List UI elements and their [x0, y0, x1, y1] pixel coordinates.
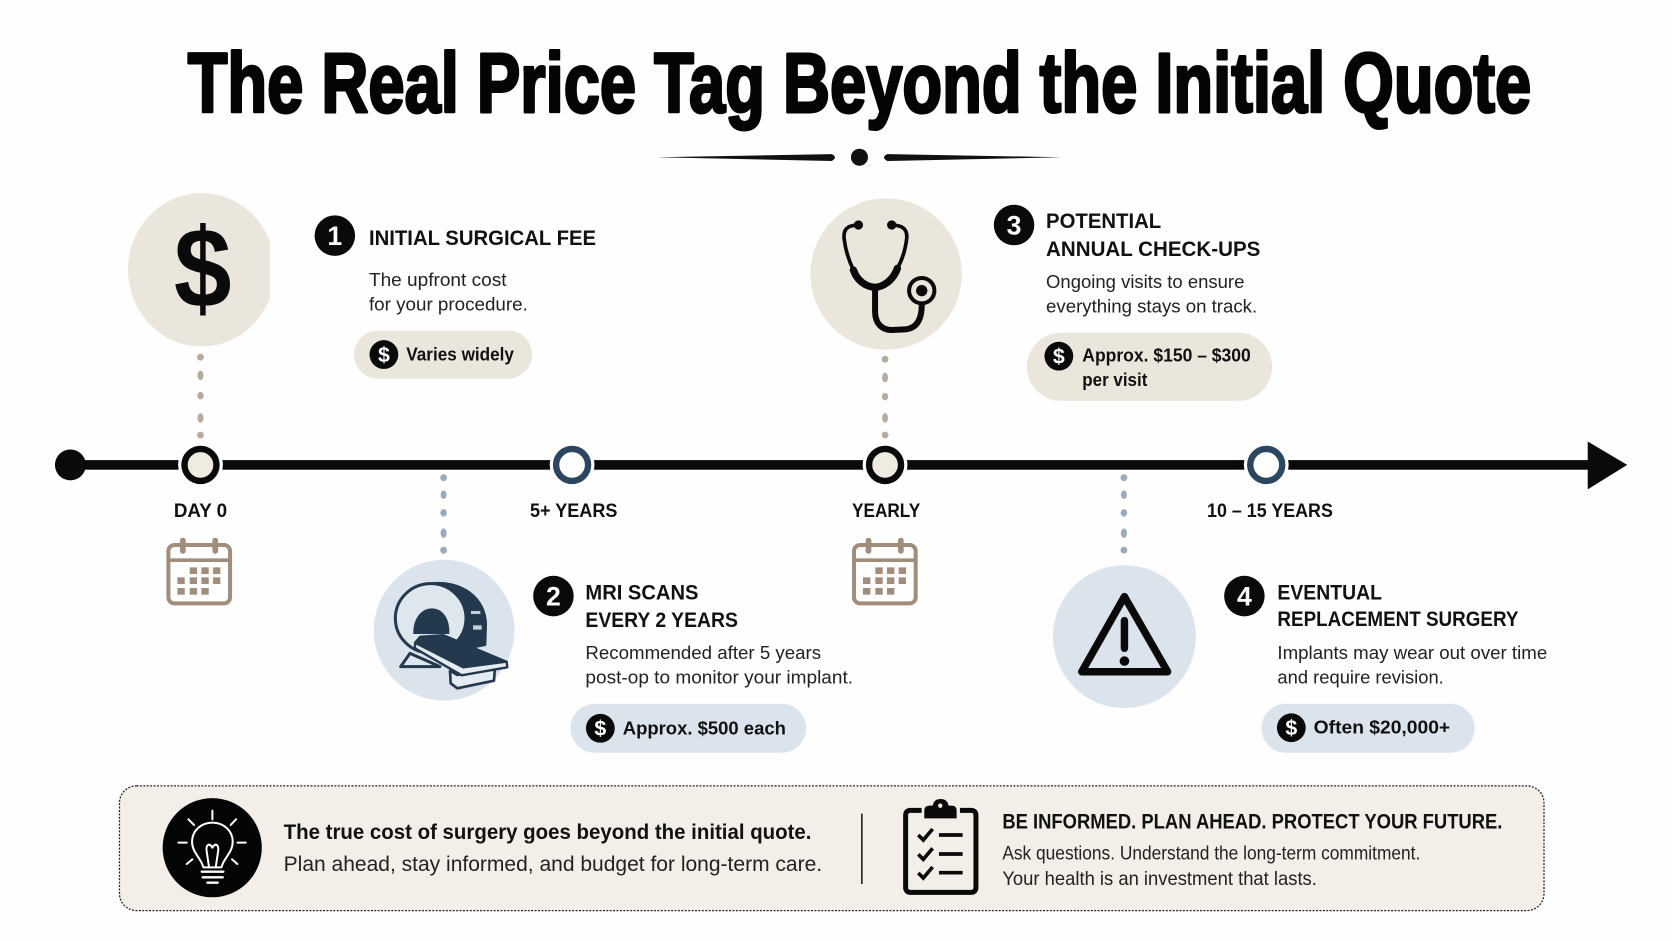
label: 5+ years: 5+ YEARS: [530, 501, 618, 522]
summary text left: [284, 820, 822, 876]
timeline arrow: [55, 441, 1627, 489]
step 3 heading: ANNUAL CHECK-UPS: [1046, 237, 1260, 261]
step 3 cost pill: per visit: [1082, 369, 1147, 390]
step 3 cost pill: Approx. $150 – $300: [1082, 344, 1251, 365]
step 1 cost pill: $: [378, 343, 390, 367]
timeline node: 10-15 years: [1244, 443, 1289, 487]
step 3 cost pill: $: [1053, 345, 1065, 369]
step 3 description: everything stays on track.: [1046, 295, 1257, 316]
step 1 cost pill: Varies widely: [406, 343, 515, 364]
icon: checklist clipboard: [906, 799, 976, 892]
step 2 heading: MRI SCANS: [585, 580, 698, 604]
icon: dollar circle: [128, 193, 275, 347]
icon: calendar day 0: [168, 538, 230, 603]
summary text left: Plan ahead, stay informed, and budget for long-term care.: [284, 852, 822, 876]
step number 2: 2: [546, 582, 561, 612]
summary text right: [1002, 810, 1502, 890]
title divider: [657, 149, 1062, 166]
step 3 heading: [1046, 209, 1260, 261]
step 4 cost pill: $: [1285, 716, 1297, 740]
step number 3: 3: [1007, 211, 1021, 241]
icon: stethoscope circle: [810, 198, 962, 350]
step 2 cost pill: [570, 704, 806, 753]
summary text right: Your health is an investment that lasts.: [1002, 868, 1317, 890]
step 3 cost pill: [1027, 333, 1272, 401]
icon: MRI scanner circle: [374, 560, 515, 701]
step 4 cost pill: Often $20,000+: [1314, 717, 1450, 738]
step 1 description: for your procedure.: [369, 293, 528, 314]
step 1 heading: INITIAL SURGICAL FEE: [369, 226, 596, 250]
step number 1: 1: [327, 221, 342, 251]
timeline node: day 0: [178, 443, 223, 487]
step 2 heading: EVERY 2 YEARS: [585, 608, 738, 632]
step 4 description: and require revision.: [1277, 666, 1444, 687]
connector dots: step 4: [1120, 474, 1127, 554]
timeline node: 5+ years: [550, 443, 594, 487]
step 2 description: post-op to monitor your implant.: [585, 666, 853, 687]
step 4 heading: EVENTUAL: [1277, 580, 1382, 604]
step number 4: 4: [1237, 582, 1252, 612]
step 3 description: Ongoing visits to ensure: [1046, 271, 1244, 292]
panel: step 3 annual check-ups: [994, 205, 1272, 401]
step 1 description: The upfront cost: [369, 269, 507, 290]
summary text right: BE INFORMED. PLAN AHEAD. PROTECT YOUR FUTURE.: [1002, 810, 1502, 834]
icon: calendar yearly: [854, 538, 916, 603]
icon: warning circle: [1053, 565, 1196, 708]
panel: step 4 replacement surgery: [1224, 576, 1547, 753]
timeline node: yearly: [863, 443, 907, 487]
step 4 description: Implants may wear out over time: [1277, 642, 1547, 663]
step 3 description: [1046, 271, 1257, 316]
step 4 cost pill: [1261, 704, 1475, 753]
step 2 cost pill: $: [594, 717, 606, 741]
step 4 heading: [1277, 580, 1518, 631]
panel: step 1 initial surgical fee: [315, 215, 596, 379]
summary text left: The true cost of surgery goes beyond the initial quote.: [284, 820, 811, 844]
connector dots: step 2: [440, 474, 447, 554]
summary text right: Ask questions. Understand the long-term commitment.: [1002, 842, 1420, 864]
summary background: [119, 786, 1544, 911]
label: yearly: YEARLY: [852, 501, 920, 522]
connector dots: step 1: [197, 354, 204, 438]
step 1 cost pill: [354, 331, 532, 379]
step 4 description: [1277, 642, 1547, 687]
step 2 heading: [585, 580, 738, 632]
step 4 heading: REPLACEMENT SURGERY: [1277, 607, 1518, 631]
step 3 heading: POTENTIAL: [1046, 209, 1161, 233]
panel: step 2 MRI scans: [533, 576, 853, 753]
step 1 description: [369, 269, 528, 314]
icon: light bulb: [163, 798, 262, 897]
panel: bottom summary: [119, 786, 1544, 911]
step 2 description: Recommended after 5 years: [585, 642, 821, 663]
connector dots: step 3: [882, 356, 888, 438]
step 2 cost pill: Approx. $500 each: [623, 718, 786, 739]
step number 3: [994, 205, 1034, 245]
label: day 0: DAY 0: [174, 501, 227, 522]
step 2 description: [585, 642, 853, 687]
step number 2: [533, 576, 574, 616]
step number 4: [1224, 576, 1265, 616]
step number 1: [315, 215, 355, 256]
label: 10-15 years: 10 – 15 YEARS: [1207, 501, 1333, 522]
icon: dollar circle: $: [174, 205, 231, 331]
